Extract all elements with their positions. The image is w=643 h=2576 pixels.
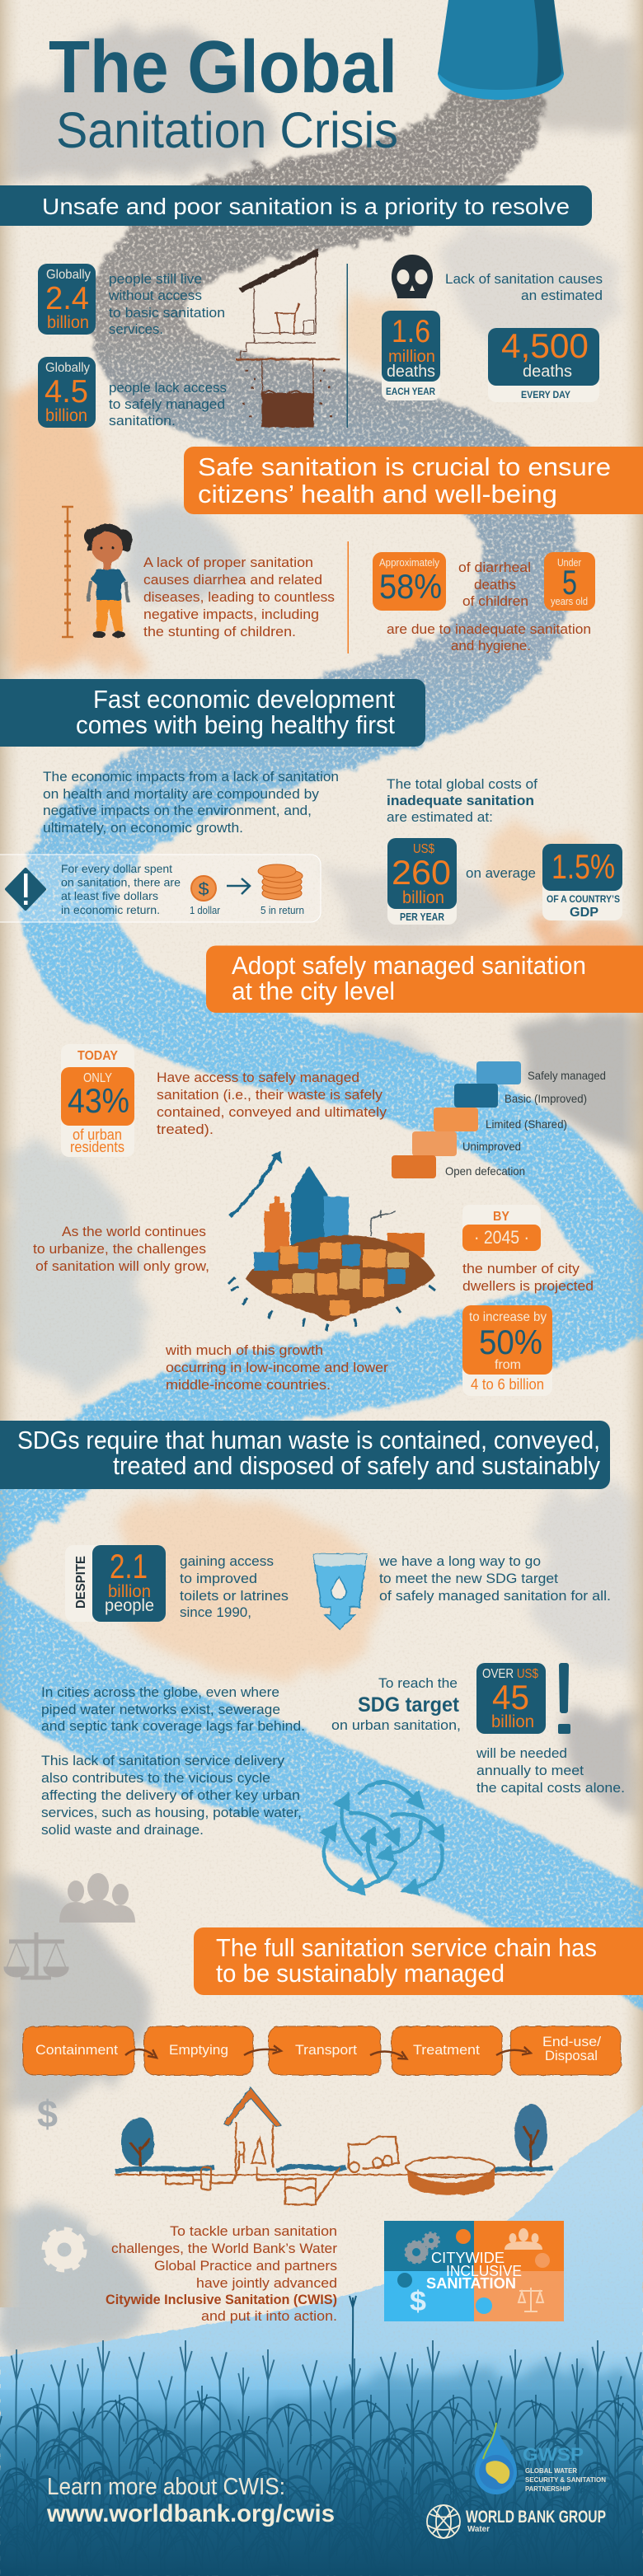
- coin labels: [190, 904, 304, 916]
- stat: 4,500 deaths every day: deaths: [523, 363, 572, 381]
- call to action: Learn more about CWIS:: [47, 2474, 285, 2500]
- stat: by 2045: BY: [493, 1210, 509, 1224]
- step: limited: Limited (Shared): [486, 1117, 567, 1131]
- icon: ghost scales: [5, 1932, 68, 1978]
- sanitation service chain: [23, 2026, 621, 2075]
- text: to tackle urban sanitation: Global Practice and partners: [154, 2258, 337, 2274]
- text: lack of sanitation causes: [445, 271, 603, 303]
- puzzle dollar: $: [410, 2286, 426, 2317]
- logo: GWSP: PARTNERSHIP: [525, 2485, 570, 2493]
- text: people still live: services.: [109, 321, 163, 337]
- stat: under 5 years old: years old: [551, 595, 588, 607]
- step: treatment: [392, 2026, 502, 2075]
- icon: height ruler: [62, 507, 73, 638]
- stat: increase by 50%: to increase by: [469, 1310, 547, 1324]
- text: of diarrheal deaths of children: deaths: [474, 577, 516, 592]
- stat: despite 2.1 billion people: people: [105, 1596, 154, 1615]
- step: open defecation: Open defecation: [445, 1164, 525, 1178]
- stat: increase by 50%: 4 to 6 billion: [471, 1376, 544, 1393]
- text: to reach the SDG target: To reach the: [378, 1675, 458, 1691]
- text: to tackle urban sanitation: Citywide Inclusive Sanitation (CWIS): [106, 2292, 337, 2307]
- text: total global costs: are estimated at:: [387, 809, 493, 825]
- stat: 1.6 million deaths each year: deaths: [387, 363, 435, 381]
- text: the number of city dwellers: the number of city: [462, 1261, 580, 1276]
- text: economic impacts: on health and mortality are compounded by: [43, 786, 320, 802]
- stat: 4.5 billion: [38, 357, 96, 428]
- stat: 4.5 billion: 4.5: [45, 374, 88, 410]
- banner: SDGs: SDGs require that human waste is contained, conveyed,: [17, 1426, 600, 1454]
- text: economic impacts: ultimately, on economic growth.: [43, 820, 243, 836]
- step: containment: Containment: [35, 2042, 118, 2058]
- banner: unsafe and poor sanitation: [0, 185, 592, 226]
- ground: [115, 2174, 546, 2176]
- text: have access: sanitation (i.e., their waste is safely: [157, 1087, 383, 1103]
- banner: service chain: The full sanitation service chain has: [216, 1933, 597, 1962]
- text: with much of this growth: [165, 1342, 388, 1393]
- text: cities across the globe: also contributes to the vicious cycle: [41, 1770, 270, 1786]
- text: with much of this growth: occurring in low-income and lower: [166, 1360, 388, 1375]
- text: with much of this growth: middle-income countries.: [166, 1377, 331, 1393]
- banner: fast economic development: comes with being healthy first: [76, 710, 395, 739]
- callout text: For every dollar spent: [61, 862, 172, 875]
- text: people still live: to basic sanitation: [109, 305, 225, 321]
- banner: service chain: to be sustainably managed: [216, 1959, 505, 1988]
- icon: ghost people: [59, 1873, 135, 1923]
- step: limited: [434, 1108, 567, 1131]
- step: open defecation: [392, 1155, 525, 1178]
- text: total global costs: The total global costs of: [387, 776, 537, 792]
- text: people still live: people still live: [109, 271, 202, 287]
- text: cities across the globe: solid waste and drainage.: [41, 1822, 204, 1838]
- text: lack of proper sanitation: diseases, leading to countless: [143, 589, 335, 605]
- stat: increase by 50%: 50%: [479, 1323, 542, 1361]
- stat: today only 43%: ONLY: [83, 1071, 112, 1085]
- stat: 1.5% of GDP: [542, 844, 622, 920]
- lower landscape wash: [0, 2105, 643, 2576]
- step: unimproved: [412, 1131, 521, 1156]
- stat: despite 2.1 billion people: DESPITE: [74, 1556, 88, 1609]
- text: of diarrheal deaths of children: of children: [462, 593, 528, 609]
- text: long way to go: [378, 1553, 611, 1604]
- stat: 4.5 billion: billion: [45, 406, 87, 425]
- logo: GWSP: SECURITY & SANITATION: [525, 2475, 606, 2484]
- stat: over US$45 billion: 45: [492, 1678, 529, 1717]
- icon: arrow: [227, 878, 250, 894]
- call to action: [46, 2474, 335, 2527]
- step: basic: Basic (Improved): [505, 1092, 587, 1105]
- text: as the world continues: As the world continues: [62, 1224, 206, 1239]
- text: will be needed: the capital costs alone.: [476, 1780, 625, 1796]
- step: end-use disposal: Disposal: [545, 2048, 598, 2063]
- stat: today only 43%: of urban: [73, 1126, 122, 1143]
- stat: US$260 billion per year: [387, 838, 457, 925]
- text: cities across the globe: and septic tank coverage lags far behind.: [41, 1718, 305, 1734]
- text: lack of proper sanitation: A lack of proper sanitation: [143, 555, 313, 570]
- stat: US$260 billion per year: PER YEAR: [400, 911, 444, 923]
- text: lack of proper sanitation: the stunting of children.: [143, 624, 296, 639]
- text: gaining access: toilets or latrines: [180, 1588, 289, 1604]
- text: have access: Have access to safely managed: [157, 1070, 359, 1085]
- puzzle gears: [406, 2233, 439, 2263]
- text: people lack access: [109, 380, 227, 429]
- stat: despite 2.1 billion people: [65, 1545, 166, 1622]
- banner: SDGs: treated and disposed of safely and sustainably: [113, 1451, 600, 1480]
- step: transport: [269, 2026, 381, 2075]
- stat: 1.6 million deaths each year: EACH YEAR: [386, 386, 435, 397]
- stat: approximately 58%: [373, 552, 446, 611]
- text: as the world continues: of sanitation will only grow,: [35, 1258, 209, 1274]
- text: economic impacts: The economic impacts from a lack of sanitation: [43, 769, 339, 785]
- stat: by 2045: [462, 1205, 541, 1251]
- text: are due to inadequate sanitation: and hygiene.: [451, 638, 531, 653]
- text: cities across the globe: services, such as housing, potable water,: [41, 1805, 302, 1820]
- icon: vicious cycle arrows: [324, 1782, 443, 1889]
- text: the number of city dwellers: dwellers is projected: [462, 1278, 594, 1294]
- stat: US$260 billion per year: 260: [392, 853, 451, 892]
- banner: adopt safely managed sanitation: [206, 946, 643, 1013]
- stat: 1.5% of GDP: GDP: [570, 906, 598, 920]
- logo: GWSP: GWSP: [523, 2444, 584, 2465]
- call to action: www.worldbank.org/cwis: [46, 2500, 335, 2527]
- stat: 2.4 billion: Globally: [46, 268, 91, 282]
- text: the number of city dwellers: [462, 1261, 594, 1294]
- text: cities across the globe: [41, 1684, 305, 1838]
- text: long way to go: to meet the new SDG target: [379, 1571, 558, 1586]
- callout: return on sanitation: [0, 855, 321, 922]
- text: with much of this growth: with much of this growth: [165, 1342, 323, 1358]
- banner: adopt safely managed sanitation: at the city level: [232, 977, 395, 1005]
- treatment pond: [406, 2157, 495, 2195]
- logo: World Bank Group: [427, 2505, 606, 2538]
- coin labels: 5 in return: [260, 904, 304, 916]
- pipes and tanks: [166, 2151, 340, 2204]
- icon: one coin: [191, 876, 216, 901]
- stat: US$260 billion per year: US$: [413, 842, 434, 856]
- text: of diarrheal deaths of children: of diarrheal: [458, 560, 531, 575]
- text: are due to inadequate sanitation: [387, 621, 591, 653]
- icon: child: [84, 524, 133, 638]
- callout text: in economic return.: [61, 903, 160, 916]
- puzzle wording: SANITATION: [426, 2275, 516, 2292]
- stat: over US$45 billion: OVER US$: [482, 1667, 538, 1681]
- step: basic: [454, 1084, 587, 1108]
- stat: today only 43%: 43%: [68, 1081, 129, 1120]
- stat: 2.4 billion: billion: [47, 313, 89, 332]
- truck: [349, 2137, 399, 2172]
- text: total global costs: [387, 776, 537, 825]
- text: economic impacts: negative impacts on the environment, and,: [43, 803, 312, 818]
- text: have access: treated).: [157, 1122, 214, 1137]
- puzzle people: [505, 2228, 542, 2250]
- banner: SDGs: [0, 1421, 610, 1489]
- step: emptying: Emptying: [169, 2042, 228, 2058]
- stat: approximately 58%: 58%: [379, 567, 442, 606]
- banner: adopt safely managed sanitation: Adopt safely managed sanitation: [232, 951, 586, 980]
- step: end-use disposal: End-use/: [542, 2034, 601, 2049]
- puzzle logo: citywide inclusive sanitation: [384, 2221, 564, 2321]
- text: gaining access: since 1990,: [180, 1604, 251, 1620]
- stat: by 2045: · 2045 ·: [474, 1227, 529, 1248]
- stat: despite 2.1 billion people: billion: [108, 1582, 151, 1601]
- icon: pipe outlet: [438, 0, 564, 100]
- text: have access: [157, 1070, 387, 1137]
- icon: glass of water with arrow: [313, 1554, 367, 1629]
- stat: 1.6 million deaths each year: [382, 311, 440, 400]
- puzzle wording: [426, 2250, 522, 2292]
- stat: increase by 50%: [462, 1305, 552, 1396]
- title: The Global: [49, 26, 397, 109]
- icon: warning diamond: [7, 869, 45, 909]
- stat: despite 2.1 billion people: 2.1: [110, 1547, 148, 1585]
- stat: today only 43%: residents: [70, 1139, 124, 1155]
- text: people lack access: people lack access: [109, 380, 227, 396]
- stat: 4,500 deaths every day: EVERY DAY: [521, 389, 570, 400]
- logo: GWSP: [475, 2422, 606, 2494]
- banner: safe sanitation: citizens’ health and well-being: [198, 480, 557, 508]
- step: emptying: [144, 2026, 253, 2075]
- stat: 2.4 billion: 2.4: [45, 281, 89, 316]
- text: lack of proper sanitation: causes diarrhea and related: [143, 572, 322, 588]
- text: to reach the SDG target: on urban sanitation,: [331, 1717, 461, 1733]
- banner: safe sanitation: Safe sanitation is crucial to ensure: [198, 452, 611, 481]
- text: on average: on average: [466, 865, 536, 881]
- tree left: [121, 2117, 154, 2175]
- corn field: [0, 2296, 643, 2576]
- stat: today only 43%: [61, 1044, 134, 1157]
- text: lack of sanitation causes: Lack of sanitation causes: [445, 271, 603, 287]
- icon: coin stack: [258, 864, 303, 900]
- icon: exclamation mark: [558, 1663, 570, 1734]
- text: cities across the globe: This lack of sanitation service delivery: [41, 1753, 285, 1768]
- banner: service chain: [194, 1927, 643, 1995]
- text: cities across the globe: piped water networks exist, sewerage: [41, 1702, 280, 1717]
- text: gaining access: to improved: [180, 1571, 257, 1586]
- banner: fast economic development: [0, 679, 425, 747]
- icon: growing city: [228, 1150, 435, 1331]
- icon: skull: [392, 255, 433, 298]
- stat: over US$45 billion: [476, 1663, 546, 1734]
- text: people lack access: to safely managed: [109, 396, 225, 412]
- stat: today only 43%: TODAY: [77, 1049, 118, 1063]
- chain arrows: [125, 2049, 527, 2057]
- title: Sanitation Crisis: [56, 102, 398, 158]
- step: transport: Transport: [295, 2042, 357, 2058]
- text: lack of sanitation causes: an estimated: [521, 288, 603, 303]
- text: lack of proper sanitation: [143, 555, 335, 639]
- banner: fast economic development: Fast economic development: [93, 685, 395, 714]
- text: to tackle urban sanitation: and put it into action.: [201, 2308, 337, 2324]
- divider: [348, 541, 349, 653]
- text: long way to go: we have a long way to go: [378, 1553, 541, 1569]
- puzzle wording: CITYWIDE: [431, 2250, 505, 2266]
- puzzle scales: [519, 2288, 543, 2311]
- icon: gear: [45, 2222, 101, 2269]
- text: long way to go: of safely managed sanitation for all.: [379, 1588, 611, 1604]
- logo: GWSP: GLOBAL WATER: [525, 2466, 577, 2475]
- text: people still live: without access: [108, 288, 202, 303]
- sanitation ladder: [392, 1061, 606, 1178]
- callout text: [61, 862, 181, 916]
- banner: safe sanitation: [184, 447, 643, 514]
- stat: 1.6 million deaths each year: million: [388, 348, 435, 366]
- stat: 1.5% of GDP: OF A COUNTRY’S: [547, 893, 620, 905]
- text: economic impacts: [43, 769, 339, 836]
- text: will be needed: [476, 1745, 625, 1796]
- divider: [346, 264, 348, 428]
- logo: World Bank Group: Water: [467, 2524, 490, 2534]
- text: gaining access: gaining access: [180, 1553, 274, 1569]
- stat: US$260 billion per year: billion: [402, 888, 444, 907]
- step: end-use disposal: [510, 2026, 621, 2075]
- text: total global costs: inadequate sanitation: [387, 793, 534, 808]
- callout text: at least five dollars: [61, 889, 158, 902]
- text: will be needed: annually to meet: [476, 1763, 584, 1778]
- text: as the world continues: [33, 1224, 209, 1274]
- step: safely managed: Safely managed: [528, 1069, 606, 1082]
- stat: 4,500 deaths every day: 4,500: [501, 326, 589, 365]
- stat: approximately 58%: Approximately: [379, 556, 439, 569]
- title: [49, 26, 398, 158]
- banner: unsafe and poor sanitation: Unsafe and poor sanitation is a priority to resolve: [42, 194, 570, 219]
- text: of diarrheal deaths of children: [458, 560, 531, 609]
- stat: 1.6 million deaths each year: 1.6: [392, 314, 430, 349]
- icon: ghost dollar: $: [37, 2092, 58, 2135]
- text: to tackle urban sanitation: To tackle urban sanitation: [170, 2223, 337, 2239]
- icon: pit latrine: [236, 249, 340, 427]
- stat: over US$45 billion: billion: [491, 1712, 534, 1731]
- step: safely managed: [476, 1061, 606, 1084]
- text: people lack access: sanitation.: [109, 413, 176, 429]
- text: as the world continues: to urbanize, the challenges: [33, 1241, 206, 1257]
- text: to reach the SDG target: SDG target: [358, 1693, 460, 1717]
- step: treatment: Treatment: [413, 2042, 480, 2058]
- tree right: [514, 2104, 547, 2172]
- text: to tackle urban sanitation: [106, 2223, 337, 2324]
- text: to reach the SDG target: [331, 1675, 461, 1733]
- stat: increase by 50%: from: [495, 1358, 521, 1372]
- illustration: sanitation system: [115, 2087, 552, 2204]
- text: people still live: [108, 271, 225, 337]
- text: lack of proper sanitation: negative impacts, including: [143, 607, 319, 622]
- text: to tackle urban sanitation: challenges, the World Bank’s Water: [111, 2241, 337, 2256]
- stat: under 5 years old: Under: [557, 556, 582, 569]
- house: [223, 2087, 281, 2174]
- stat: 4.5 billion: Globally: [45, 361, 90, 375]
- step: containment: [23, 2026, 134, 2075]
- step: unimproved: Unimproved: [462, 1140, 521, 1153]
- stat: under 5 years old: [544, 552, 595, 611]
- text: are due to inadequate sanitation: are due to inadequate sanitation: [387, 621, 591, 637]
- text: cities across the globe: affecting the delivery of other key urban: [41, 1787, 300, 1803]
- text: cities across the globe: In cities across the globe, even where: [41, 1684, 279, 1700]
- text: to tackle urban sanitation: have jointly advanced: [196, 2275, 337, 2291]
- text: have access: contained, conveyed and ultimately: [157, 1104, 387, 1120]
- puzzle wording: INCLUSIVE: [446, 2263, 522, 2279]
- stat: under 5 years old: 5: [562, 563, 577, 602]
- icon: one coin: $: [198, 880, 209, 899]
- stream: river of dirty water turning clean: [0, 82, 643, 1969]
- stat: 1.5% of GDP: 1.5%: [551, 847, 615, 886]
- stat: 2.4 billion: [38, 264, 96, 335]
- text: will be needed: will be needed: [476, 1745, 567, 1761]
- stat: 4,500 deaths every day: [488, 326, 599, 402]
- coin labels: 1 dollar: [190, 904, 221, 916]
- callout text: on sanitation, there are: [61, 875, 181, 888]
- text: gaining access: [180, 1553, 289, 1620]
